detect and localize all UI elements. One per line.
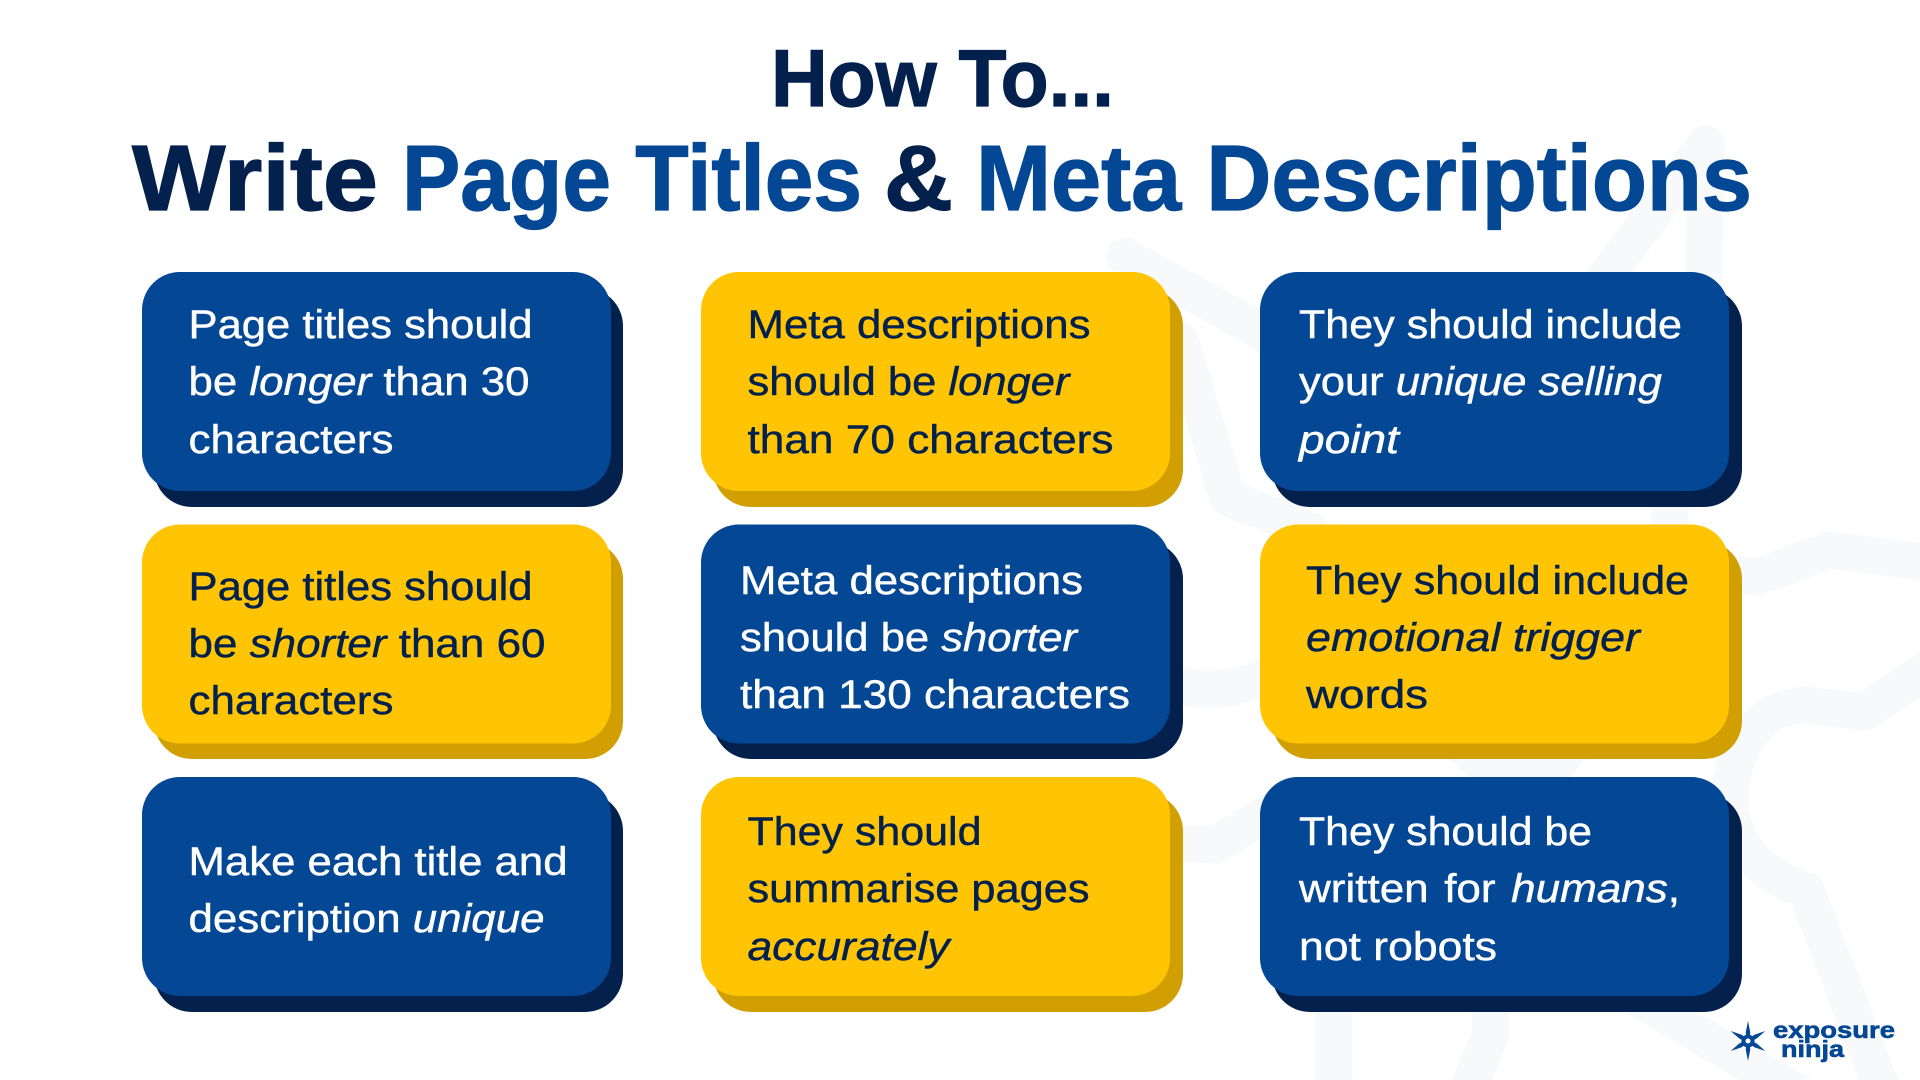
card: page titles longer than 30: characters: [188, 418, 394, 462]
card: page titles longer than 30: [142, 272, 623, 507]
card: written for humans: They should be: [1299, 810, 1592, 854]
card: emotional trigger words: They should include: [1306, 559, 1689, 603]
card: written for humans: [1260, 777, 1742, 1012]
card: unique title and description: description unique: [188, 897, 544, 941]
card: page titles longer than 30: Page titles should: [188, 303, 532, 347]
title: how to: How To...: [771, 34, 1114, 124]
card: meta descriptions shorter than 130: Meta descriptions: [740, 559, 1083, 603]
logo: exposure ninja: [1730, 1017, 1895, 1062]
card: unique title and description: [142, 777, 623, 1012]
card: meta descriptions longer than 70: should be longer: [748, 360, 1071, 404]
title: write page titles and meta descriptions: [132, 126, 1752, 230]
card: unique selling point: your unique selling: [1299, 360, 1662, 404]
card: page titles shorter than 60: [142, 524, 623, 759]
card: written for humans: not robots: [1299, 925, 1497, 969]
card: emotional trigger words: words: [1305, 673, 1428, 717]
background watermark: shuriken outline: [1125, 144, 1920, 1080]
card: emotional trigger words: emotional trigger: [1306, 616, 1642, 660]
card: unique selling point: They should include: [1299, 303, 1682, 347]
logo: exposure ninja: ninja: [1781, 1036, 1844, 1062]
logo: exposure ninja: exposure: [1773, 1017, 1895, 1043]
card: summarise pages accurately: summarise pages: [748, 867, 1090, 911]
icon: shuriken: [1730, 1021, 1766, 1061]
card: emotional trigger words: [1260, 524, 1742, 759]
card: meta descriptions longer than 70: than 70 characters: [748, 418, 1114, 462]
card: meta descriptions shorter than 130: should be shorter: [740, 616, 1079, 660]
card: unique selling point: point: [1298, 418, 1401, 462]
title: write page titles and meta descriptions: &: [884, 126, 953, 230]
card: unique title and description: Make each title and: [188, 840, 568, 884]
card: meta descriptions longer than 70: [701, 272, 1183, 507]
card: written for humans: written for humans ,: [1298, 867, 1680, 911]
card: summarise pages accurately: They should: [748, 810, 982, 854]
card: meta descriptions shorter than 130: [701, 524, 1183, 759]
title: write page titles and meta descriptions: Page Titles: [402, 126, 862, 230]
card: summarise pages accurately: [701, 777, 1183, 1012]
card: page titles shorter than 60: be shorter than 60: [188, 622, 546, 666]
card: meta descriptions longer than 70: Meta descriptions: [748, 303, 1090, 347]
card: page titles longer than 30: be longer than 30: [188, 360, 530, 404]
card: meta descriptions shorter than 130: than 130 characters: [740, 673, 1130, 717]
card: unique selling point: [1260, 272, 1742, 507]
card: page titles shorter than 60: Page titles should: [188, 565, 532, 609]
card: page titles shorter than 60: characters: [188, 679, 394, 723]
card: summarise pages accurately: accurately: [748, 925, 953, 969]
title: write page titles and meta descriptions: Meta Descriptions: [976, 126, 1752, 230]
title: write page titles and meta descriptions: Write: [132, 126, 378, 230]
